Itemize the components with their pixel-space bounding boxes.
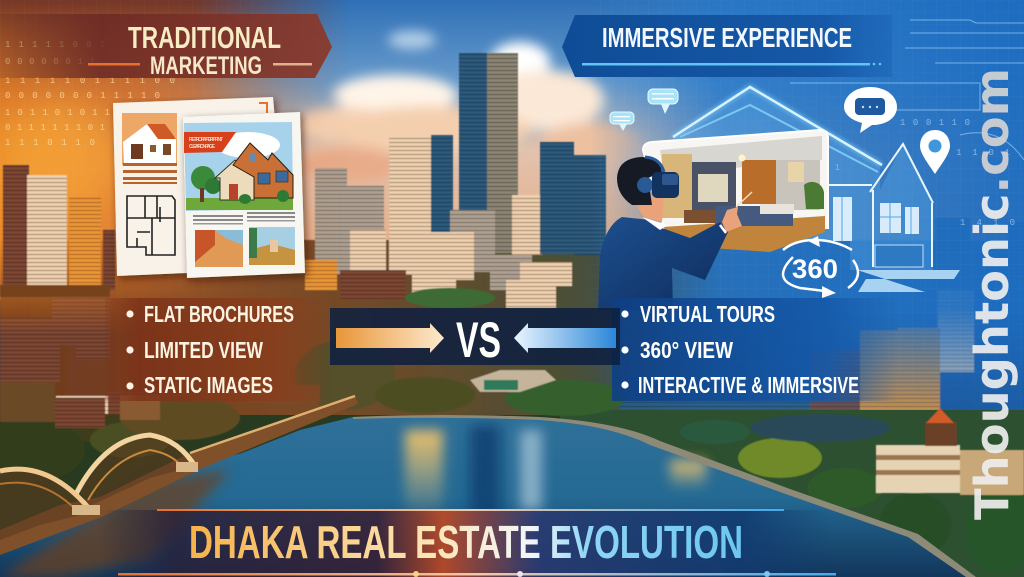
bullet: interactive and immersive: INTERACTIVE & IMMERSIVE [638,372,859,398]
watermark: Thoughtonic.com: Thoughtonic.com [965,68,1019,520]
VR headset [637,157,679,198]
banner: traditional marketing [0,14,332,80]
left orange digital overlay: 1 1 1 0 1 1 0 [5,138,95,148]
river embankment [353,415,976,577]
background: city skyline [0,53,1024,430]
banner: immersive experience [562,15,892,77]
brochures: traditional print materials [113,97,305,278]
house windows [833,197,923,267]
brochure front page [183,112,305,278]
lake with reflections [0,416,973,577]
bullet: virtual tours [621,301,775,327]
arrow: toward VS from left [336,323,444,353]
heading: traditional: TRADITIONAL [128,20,281,55]
bullet: static images: STATIC IMAGES [144,372,273,398]
person wearing VR headset [598,157,752,310]
right blue digital overlay: 0 1 1 0 1 [940,148,1010,158]
heading: marketing: MARKETING [150,52,262,80]
midground: trees, rooftops and plaza [0,288,625,482]
left orange digital overlay: 0 1 1 1 1 1 1 0 1 [5,123,105,133]
label: VS: VS [456,312,501,368]
panel: immersive list [612,298,897,401]
title: Dhaka real estate evolution: DHAKA REAL ESTATE EVOLUTION [189,516,743,568]
brochure front page: RETRO PAPER PRINT [189,137,223,143]
room interior card [643,130,828,252]
ground base: banks and vegetation [0,410,1024,577]
footer title panel [100,509,836,577]
left orange digital overlay: 1 1 1 1 1 0 1 1 1 1 0 0 [5,76,175,86]
bullet: flat brochures [126,301,294,327]
icon: 360 view: 360 [792,254,838,284]
right bank: buildings and trees [680,408,1024,574]
bullet: flat brochures: FLAT BROCHURES [144,301,294,327]
bullet: limited view: LIMITED VIEW [144,337,263,363]
brochure back page [113,97,275,276]
left skyline towers [0,165,115,297]
right blue digital overlay: 1 4 1 0 [960,218,1015,228]
right blue digital overlay: 0 1 0 1 1 [780,163,840,173]
bridge [0,396,358,555]
arrow: toward VS from right [514,323,616,353]
left orange digital overlay: 1 0 1 1 0 1 0 1 1 [5,108,110,118]
left orange digital overlay: 0 0 0 0 0 0 0 1 1 1 1 0 [5,91,160,101]
bullet: virtual tours: VIRTUAL TOURS [640,301,775,327]
left orange digital overlay: 0 0 0 0 0 0 1 1 [5,57,95,67]
icon: large speech bubble [844,87,897,133]
bullet: 360 view: 360° VIEW [640,337,733,363]
bullet: static images [126,372,273,398]
icon: small chat bubbles [610,89,678,131]
holographic house outline [673,87,960,292]
versus band [330,308,620,368]
bullet: limited view [126,337,263,363]
right blue digital overlay [590,0,1024,440]
icon: location pin [920,130,950,174]
left orange digital overlay: 1 1 1 1 1 0 0 1 [5,40,105,50]
brochure front page: CLEAR ON PAGE [189,144,216,150]
icon: 360 view [783,236,858,298]
right blue digital overlay: 1 0 0 1 1 0 [900,118,970,128]
heading: immersive experience: IMMERSIVE EXPERIENCE [602,22,852,53]
background: sky and clouds [0,0,1024,300]
left orange digital overlay [0,0,350,335]
bullet: interactive and immersive [621,372,859,398]
panel: traditional list [105,298,330,401]
